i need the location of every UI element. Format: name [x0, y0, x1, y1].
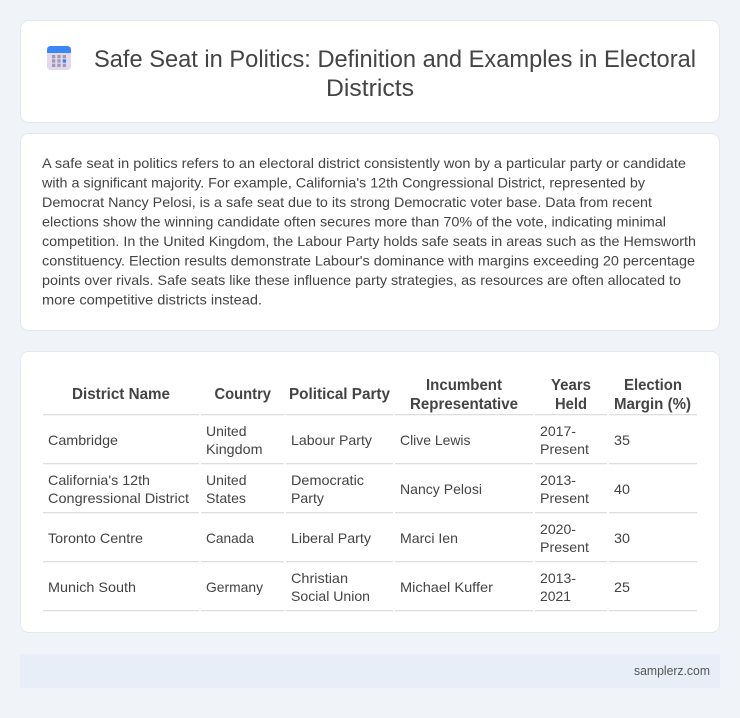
title: Safe Seat in Politics: Definition and Examples in Electoral — [94, 46, 696, 73]
panel: districts table — [20, 352, 720, 632]
table row: Munich South: Michael Kuffer — [400, 579, 493, 595]
text block: safe seat explanation: points over rivals. Safe seats like these influence party strategies, as resources are often allocated to — [42, 272, 681, 288]
table row: Munich South: Christian — [291, 570, 348, 586]
table row: California's 12th: Present — [540, 490, 589, 506]
table row: Munich South: 2021 — [540, 588, 571, 604]
table header row: District Name — [72, 386, 170, 403]
table row: Cambridge: 35 — [614, 432, 630, 448]
table row: Cambridge: Clive Lewis — [400, 432, 470, 448]
table row: California's 12th: 2013- — [540, 472, 576, 488]
text block: safe seat explanation: Democrat Nancy Pelosi, is a safe seat due to its strong Democratic voter base. Data from recent — [42, 194, 652, 210]
table row: California's 12th: Nancy Pelosi — [400, 481, 482, 497]
table row: Toronto Centre: Canada — [206, 530, 254, 546]
table row: California's 12th — [48, 472, 630, 506]
table row: California's 12th: Democratic — [291, 472, 364, 488]
table header row: Political Party — [289, 386, 390, 403]
table row: Cambridge: Labour Party — [291, 432, 372, 448]
table row: Cambridge: Cambridge — [48, 432, 118, 448]
title — [94, 46, 696, 102]
table row: Munich South: Germany — [206, 579, 263, 595]
text block: safe seat explanation: with a significant majority. For example, California's 12th Congressional District, represented by — [41, 174, 645, 190]
table row: Munich South: Social Union — [291, 588, 370, 604]
table header row: Country — [214, 386, 271, 403]
text block: safe seat explanation: competition. In the United Kingdom, the Labour Party holds safe seats in areas such as the Hemsworth — [42, 233, 696, 249]
table row: Toronto Centre: Marci Ien — [400, 530, 458, 546]
table row: Cambridge: 2017- — [540, 423, 576, 439]
table row: Munich South: 2013- — [540, 570, 576, 586]
table row: Munich South: 25 — [614, 579, 630, 595]
text block: safe seat explanation: constituency. Election results demonstrate Labour's dominance with margins exceeding 20 percentage — [42, 252, 695, 268]
table row: Munich South: Munich South — [48, 579, 136, 595]
icon: calendar — [47, 46, 71, 70]
table row: Toronto Centre: Liberal Party — [291, 530, 371, 546]
table row: Toronto Centre: Present — [540, 539, 589, 555]
table row: California's 12th: Party — [291, 490, 324, 506]
table row: Toronto Centre: 2020- — [540, 521, 576, 537]
table header row: Representative — [410, 396, 518, 413]
title: Districts — [326, 75, 414, 102]
table row: Toronto Centre — [48, 521, 630, 555]
table row: Cambridge — [48, 423, 630, 457]
footer source text: samplerz.com — [634, 664, 710, 678]
table row: Cambridge: United — [206, 423, 246, 439]
table header row: Margin (%) — [614, 396, 691, 413]
table row: California's 12th: Congressional District — [48, 490, 189, 506]
table row: Cambridge: Kingdom — [206, 441, 262, 457]
table row: California's 12th: United — [206, 472, 246, 488]
table row: California's 12th: California's 12th — [48, 472, 150, 488]
panel: title card — [20, 20, 720, 122]
text block: safe seat explanation — [41, 155, 696, 308]
table row: Munich South — [48, 570, 630, 604]
table header row: Years — [551, 377, 591, 394]
table header row: Election — [624, 377, 682, 394]
footer — [20, 654, 720, 688]
table row: California's 12th: 40 — [614, 481, 630, 497]
table row: Toronto Centre: 30 — [614, 530, 630, 546]
table header row — [72, 377, 691, 413]
table header row: Held — [555, 396, 587, 413]
panel: description — [20, 134, 720, 330]
table header row: Incumbent — [426, 377, 503, 394]
text block: safe seat explanation: A safe seat in politics refers to an electoral district consistently won by a particular party or candidate — [42, 155, 686, 171]
text block: safe seat explanation: more competitive districts instead. — [42, 292, 262, 308]
table row: Toronto Centre: Toronto Centre — [48, 530, 143, 546]
table row: California's 12th: States — [206, 490, 246, 506]
text block: safe seat explanation: elections show the winning candidate often secures more than 70% of the vote, indicating minimal — [42, 214, 666, 230]
table row: Cambridge: Present — [540, 441, 589, 457]
